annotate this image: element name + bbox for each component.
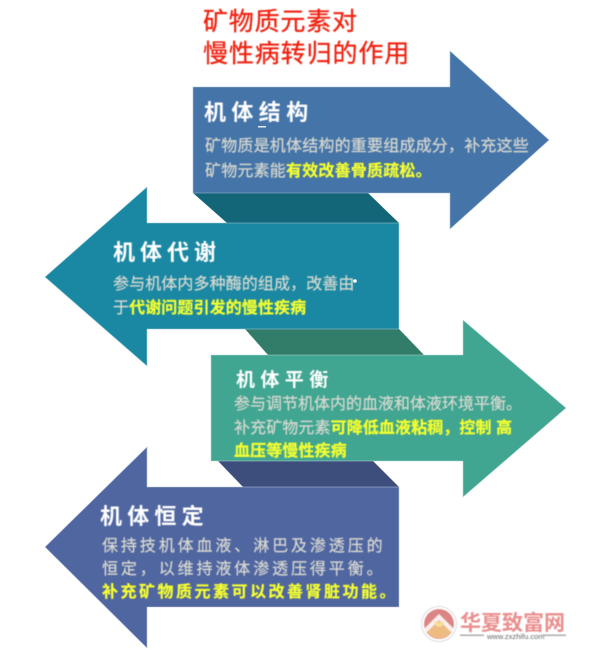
watermark logo bbox=[422, 606, 566, 642]
text: body structure: 矿物质是机体结构的重要组成成分，补充这些 bbox=[205, 137, 529, 155]
panel: balance arrow bbox=[211, 320, 566, 497]
text: homeostasis: 恒定，以维持液体渗透压得平衡。 bbox=[102, 560, 386, 578]
title: 矿物质元素对 bbox=[203, 8, 358, 36]
text: balance: 血压等慢性疾病 bbox=[234, 441, 347, 460]
text: balance: 补充矿物元素可降低血液粘稠，控制 高 bbox=[234, 418, 512, 437]
text: metabolism bbox=[113, 275, 355, 317]
small dash bbox=[258, 126, 266, 128]
text: balance: 参与调节机体内的血液和体液环境平衡。 bbox=[234, 394, 522, 413]
text: homeostasis: 补充矿物质元素可以改善肾脏功能。 bbox=[102, 582, 398, 601]
icon: logo badge bbox=[422, 606, 456, 642]
panel: metabolism arrow bbox=[45, 187, 399, 366]
panel: body structure arrow bbox=[193, 51, 549, 229]
text: homeostasis: 保持技机体血液、淋巴及渗透压的 bbox=[102, 537, 386, 555]
heading: homeostasis: 机体恒定 bbox=[100, 504, 209, 529]
connector: metabolism to balance bbox=[245, 329, 424, 355]
heading: body structure: 机体结构 bbox=[204, 100, 314, 125]
text: metabolism: 于代谢问题引发的慢性疾病 bbox=[113, 298, 306, 317]
title bbox=[203, 8, 410, 68]
text: metabolism: 参与机体内多种酶的组成，改善由 bbox=[113, 275, 355, 293]
panel: homeostasis arrow bbox=[45, 447, 399, 648]
logo name: 华夏致富网 bbox=[460, 611, 565, 635]
connector: structure to metabolism bbox=[193, 193, 399, 223]
text: body structure: 矿物元素能有效改善骨质疏松。 bbox=[205, 161, 432, 180]
title: 慢性病转归的作用 bbox=[203, 40, 410, 68]
heading: metabolism: 机体代谢 bbox=[113, 240, 221, 265]
text: balance bbox=[234, 394, 522, 460]
small dot bbox=[353, 279, 357, 283]
logo rule and URL: www.zxzhifu.com bbox=[486, 632, 545, 641]
logo rule and URL bbox=[460, 632, 566, 641]
text: body structure bbox=[205, 137, 529, 180]
heading: balance: 机体平衡 bbox=[236, 368, 334, 391]
text: homeostasis bbox=[102, 537, 398, 601]
connector: balance to homeostasis bbox=[218, 461, 399, 487]
